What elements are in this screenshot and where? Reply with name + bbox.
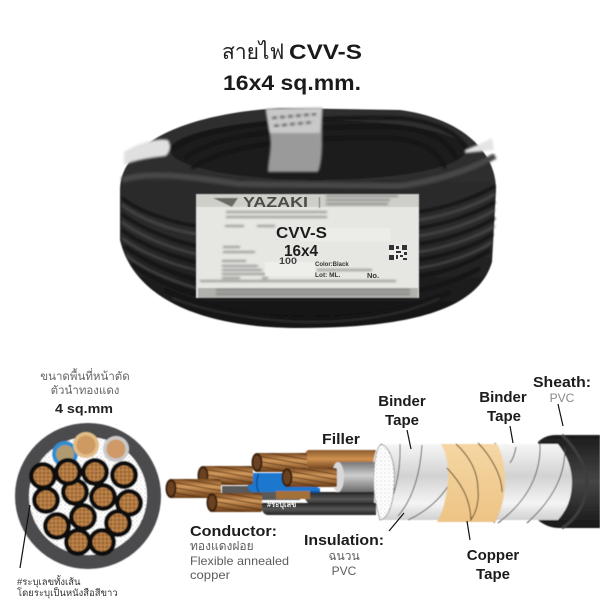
binding tape left (124, 140, 170, 165)
sheath (538, 435, 600, 528)
label: binder tape left: Tape (385, 412, 419, 429)
layered cable illustration (166, 435, 600, 528)
label: conductor: Conductor: (190, 523, 277, 540)
label: conductor: copper (190, 568, 230, 582)
label: sheath: PVC (550, 391, 575, 405)
cross-section heading: ขนาดพื้นที่หน้าตัด (40, 368, 130, 383)
product label: No. (367, 271, 379, 280)
label text: YAZAKI (243, 195, 308, 211)
filler face (373, 444, 394, 520)
title: 16x4 sq.mm. (223, 72, 361, 95)
cross-section heading (40, 368, 130, 416)
black core behind (222, 486, 300, 500)
label: filler: Filler (322, 431, 360, 448)
label: insulation (304, 513, 404, 578)
label: conductor: Flexible annealed (190, 554, 289, 568)
label: binder tape left (378, 393, 426, 449)
label: binder tape left: Binder (378, 393, 426, 410)
label: sheath: Sheath: (533, 374, 591, 391)
label: insulation: Insulation: (304, 532, 384, 549)
product label: Color:Black (315, 262, 349, 268)
grey core (332, 462, 375, 492)
QR code (389, 245, 407, 260)
cross-section heading: 4 sq.mm (55, 401, 113, 416)
label: copper tape: Copper (467, 547, 519, 564)
title: สายไฟ (222, 40, 284, 64)
product label: 100 (279, 256, 297, 267)
leader line (20, 505, 30, 568)
label: binder tape right (479, 389, 527, 443)
dark core (300, 492, 374, 506)
product label: Lot: ML. (315, 272, 340, 279)
label: copper tape: Tape (476, 566, 510, 583)
label: conductor (190, 523, 289, 582)
label: insulation: PVC (332, 564, 357, 578)
product label (196, 194, 419, 298)
copper tape (437, 444, 505, 522)
title: CVV-S (289, 41, 362, 64)
cross-section diagram (15, 368, 161, 599)
label: binder tape right: Binder (479, 389, 527, 406)
cable cross-section circle (15, 423, 161, 569)
product label: 16x4 (284, 243, 318, 260)
copper conductors (252, 453, 307, 472)
title (222, 40, 362, 95)
cross-section note (17, 575, 118, 599)
label: copper tape (467, 521, 519, 583)
binding tape top (266, 108, 322, 172)
binder tape (379, 444, 572, 520)
cross-section note: #ระบุเลขทั้งเส้น (17, 575, 81, 588)
label: binder tape right: Tape (487, 408, 521, 425)
cable coil photo (120, 108, 496, 328)
label: sheath (533, 374, 591, 426)
blue core (248, 473, 320, 492)
filler core (304, 450, 376, 468)
label: conductor: ทองแดงฝอย (190, 539, 254, 553)
product label: CVV-S (276, 225, 327, 242)
cross-section note: โดยระบุเป็นหนังสือสีขาว (17, 586, 118, 599)
cross-section heading: ตัวนำทองแดง (51, 384, 119, 397)
label: insulation: ฉนวน (328, 549, 360, 563)
binding tape right (465, 138, 494, 153)
cable marking text: #ระบุเลข (267, 500, 296, 509)
